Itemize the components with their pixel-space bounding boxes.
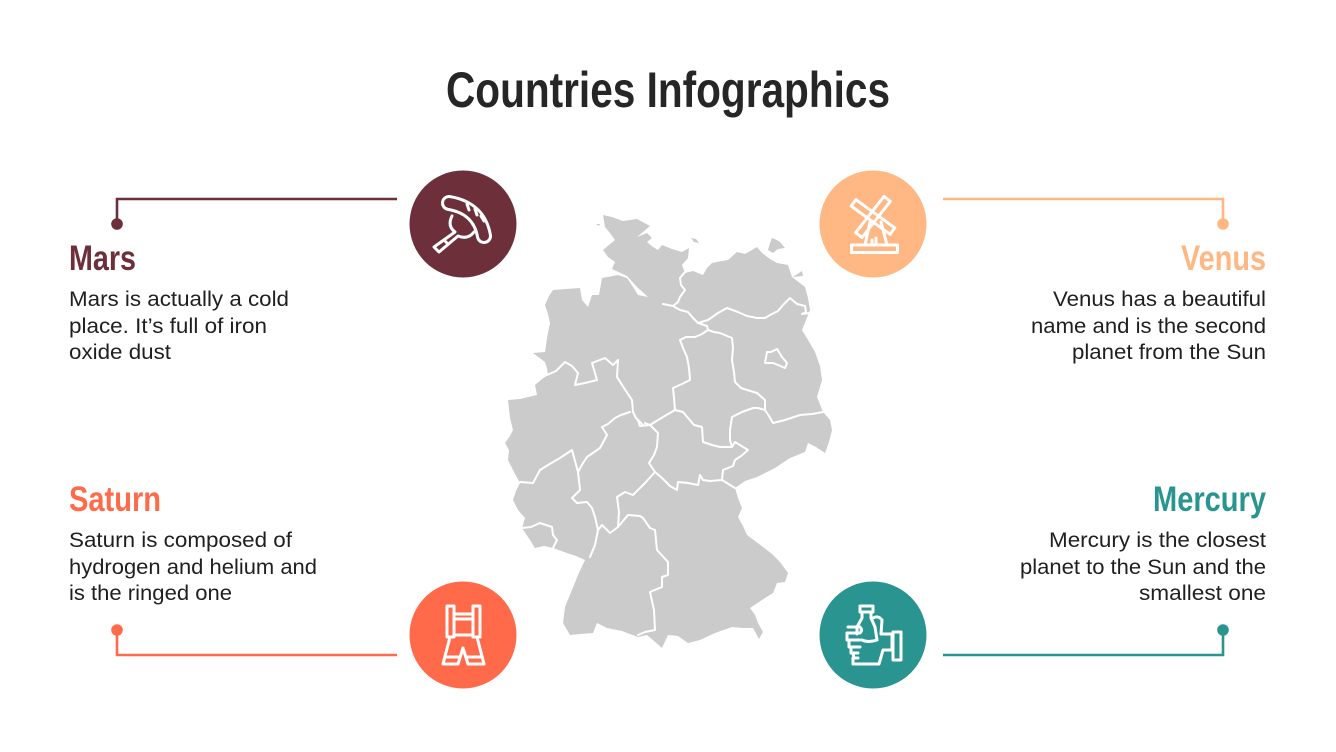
panel: Venus xyxy=(820,170,1266,364)
Mercury text: Mercury is the closest xyxy=(1049,529,1266,552)
Venus heading: Venus xyxy=(1181,239,1266,278)
Mercury heading: Mercury xyxy=(1153,480,1266,519)
Venus text: Venus has a beautiful xyxy=(1053,288,1266,311)
Saturn connector xyxy=(112,626,397,655)
Mercury text: planet to the Sun and the xyxy=(1020,556,1266,579)
Mercury text xyxy=(1020,529,1266,605)
Saturn text: hydrogen and helium and xyxy=(69,556,317,579)
icon: lederhosen xyxy=(410,582,516,688)
Berlin xyxy=(765,349,787,368)
Saturn text xyxy=(69,529,317,605)
panel: Mercury xyxy=(820,480,1266,688)
Mars heading: Mars xyxy=(69,239,136,278)
Mars text: Mars is actually a cold xyxy=(69,288,289,311)
panel: Saturn xyxy=(69,480,516,688)
icon: sausage on a fork xyxy=(410,170,516,278)
map of Germany xyxy=(505,215,832,648)
Mercury connector xyxy=(943,626,1228,655)
icon: beer bottle in thumbs-up hand xyxy=(820,582,926,688)
Mercury text: smallest one xyxy=(1139,582,1266,605)
Mars text: oxide dust xyxy=(69,341,171,364)
state borders xyxy=(520,272,823,635)
Saturn text: is the ringed one xyxy=(69,582,232,605)
icon: windmill xyxy=(820,170,926,278)
Saturn text: Saturn is composed of xyxy=(69,529,292,552)
Venus text: name and is the second xyxy=(1031,315,1266,338)
Venus text xyxy=(1031,288,1266,364)
Mars text xyxy=(69,288,289,364)
Venus connector xyxy=(943,199,1228,228)
Mars connector xyxy=(112,199,397,228)
Mars text: place. It’s full of iron xyxy=(69,315,267,338)
Venus text: planet from the Sun xyxy=(1072,341,1266,364)
Saturn heading: Saturn xyxy=(69,480,161,519)
title: Countries Infographics xyxy=(446,62,890,118)
panel: Mars xyxy=(69,170,516,364)
islands xyxy=(596,224,803,277)
